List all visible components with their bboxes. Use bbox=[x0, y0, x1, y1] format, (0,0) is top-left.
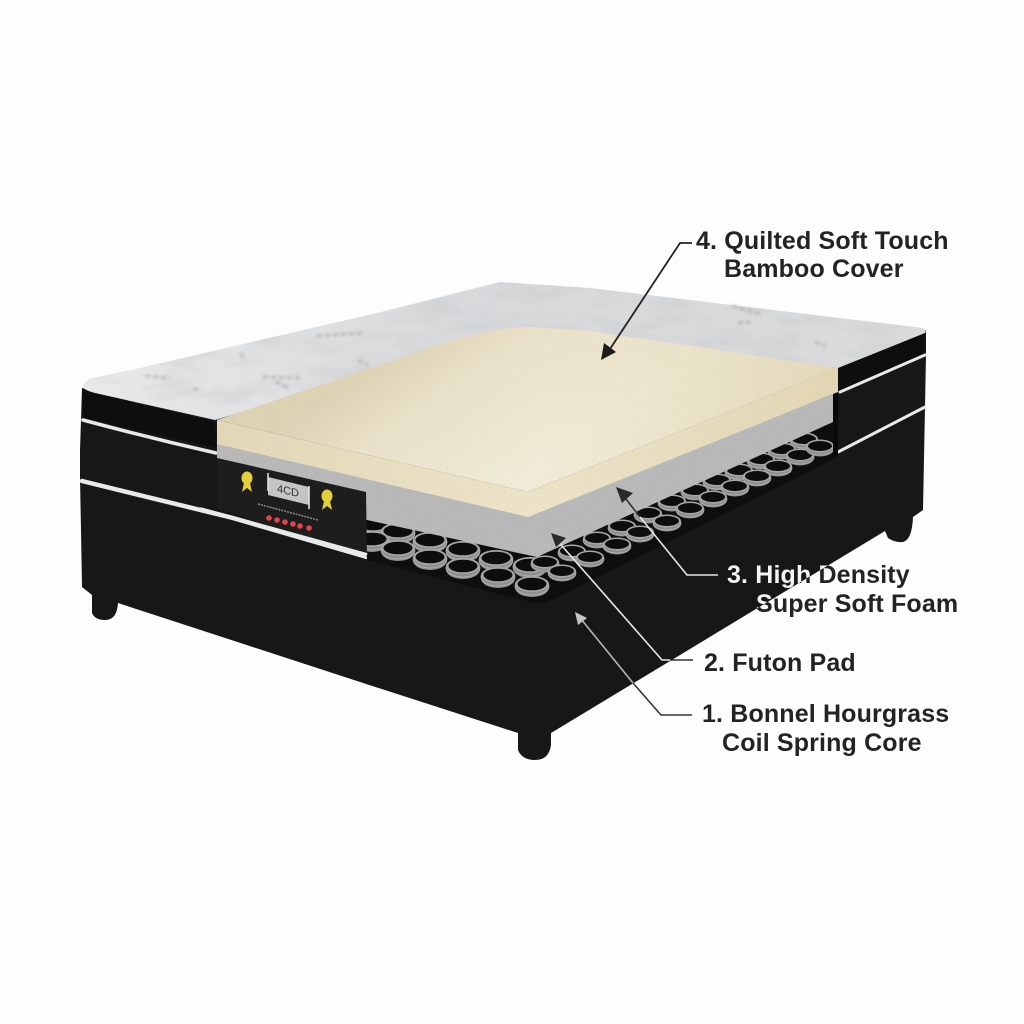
label white strip bbox=[200, 509, 367, 555]
leader line 3 bbox=[622, 494, 640, 517]
label 2: 2. Futon Pad bbox=[704, 649, 856, 677]
red indicator dots bbox=[266, 515, 312, 531]
cover quilting marks bbox=[145, 306, 826, 389]
mattress illustration bbox=[80, 282, 926, 760]
label 3: 3. High Density bbox=[727, 561, 910, 589]
arrowhead 2 bbox=[551, 533, 566, 547]
icon: left gold medallion bbox=[242, 472, 252, 492]
certificate sign bbox=[268, 473, 309, 509]
leader line 2 bbox=[555, 538, 670, 660]
label 4: 4. Quilted Soft Touch bbox=[696, 227, 949, 255]
icon: right gold medallion bbox=[322, 490, 332, 510]
foam side bbox=[217, 368, 838, 517]
quilted bamboo cover top bbox=[83, 282, 926, 420]
coil springs back row bbox=[356, 432, 818, 578]
label 1: 1. Bonnel Hourgrass bbox=[702, 700, 949, 728]
arrowhead 3 bbox=[616, 487, 633, 503]
arrowhead 1 bbox=[575, 612, 587, 625]
high density foam bbox=[217, 327, 838, 517]
futon pad bbox=[217, 392, 838, 557]
callout 3: foam bbox=[616, 487, 958, 618]
product label card bbox=[200, 458, 367, 557]
base and mattress side silhouette bbox=[80, 330, 926, 760]
label fine print bbox=[258, 504, 318, 520]
certificate sign: 4CD bbox=[277, 483, 299, 500]
upper side shading bbox=[82, 333, 925, 448]
label 1: Coil Spring Core bbox=[722, 729, 922, 757]
callout 4: quilted cover bbox=[601, 227, 949, 360]
leader line 1 bbox=[581, 619, 633, 683]
label 4: Bamboo Cover bbox=[724, 255, 904, 283]
white piping strips bbox=[82, 355, 925, 557]
leader line 4 bbox=[606, 243, 692, 355]
spring tray bbox=[367, 392, 838, 603]
callout 1: coil spring core bbox=[575, 612, 949, 757]
callout 2: futon pad bbox=[551, 533, 856, 677]
coil springs front row bbox=[355, 440, 834, 597]
foam top bbox=[217, 327, 838, 492]
arrowhead 4 bbox=[601, 343, 616, 360]
label 3: Super Soft Foam bbox=[756, 590, 958, 618]
dark right cut-out edge bbox=[833, 368, 838, 457]
foam right shading bbox=[528, 327, 838, 492]
